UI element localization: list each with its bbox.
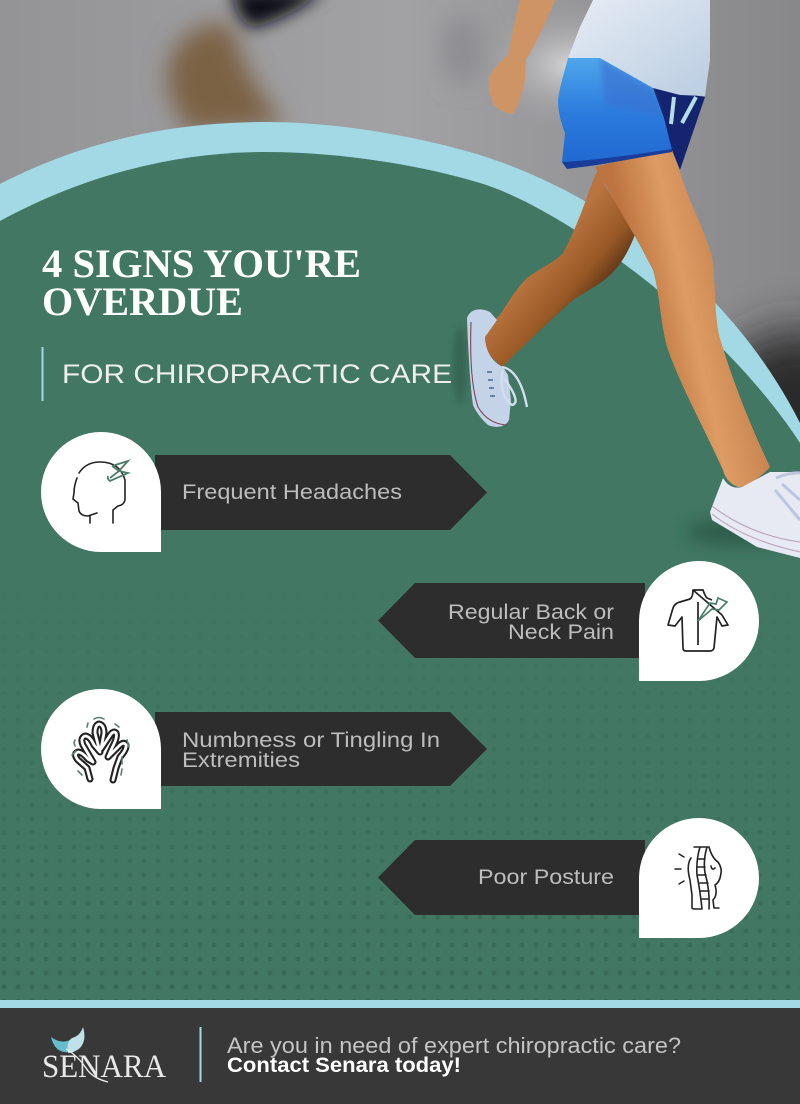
- icon badge: spine posture: [639, 818, 759, 938]
- sign 4: poor posture: [378, 818, 759, 938]
- footer call to action: Are you in need of expert chiropractic care?: [227, 1033, 681, 1058]
- logo: Senara: [42, 1027, 166, 1085]
- footer call to action: Contact Senara today!: [227, 1054, 461, 1077]
- footer divider: [200, 1027, 202, 1082]
- icon badge: back with lightning: [639, 561, 759, 681]
- back shoe: [467, 309, 527, 427]
- back leg: [485, 170, 636, 367]
- runner photo: [453, 0, 800, 558]
- arrow banner 1: Frequent Headaches: [182, 480, 402, 504]
- green panel: [0, 152, 800, 1000]
- dot pattern: [2, 845, 800, 1000]
- arrow banner 2: [378, 583, 645, 658]
- sign 3: numbness or tingling: [41, 689, 487, 809]
- footer band: [0, 1000, 800, 1008]
- shoe shadow: [687, 519, 797, 545]
- t-shirt: [568, 0, 710, 96]
- photo background: blurred street: [0, 0, 800, 490]
- title: 4 SIGNS YOU'RE: [42, 241, 361, 286]
- back shoe shadow: [453, 327, 467, 403]
- arrow banner 1: [155, 455, 487, 530]
- title: OVERDUE: [42, 279, 243, 324]
- arrow banner 2: Regular Back or: [448, 600, 614, 624]
- arrow banner 2: Neck Pain: [508, 620, 614, 644]
- footer panel: [0, 1008, 800, 1104]
- arrow banner 3: Extremities: [182, 748, 300, 772]
- logo: Senara: SENARA: [42, 1049, 166, 1085]
- footer call to action: [227, 1033, 681, 1077]
- title: [42, 241, 361, 324]
- light blue arc: [0, 122, 800, 1000]
- sign 1: frequent headaches: [41, 432, 487, 552]
- sign 2: regular back or neck pain: [378, 561, 759, 681]
- subtitle with rule: FOR CHIROPRACTIC CARE: [62, 359, 452, 389]
- logo leaf: [51, 1027, 108, 1082]
- arrow banner 4: Poor Posture: [478, 865, 614, 889]
- arm: [489, 0, 555, 114]
- front shoe: [710, 472, 800, 558]
- icon badge: tingling hand: [41, 689, 161, 809]
- arrow banner 3: [155, 712, 487, 786]
- shorts: [558, 58, 705, 170]
- front leg: [595, 150, 770, 487]
- icon badge: head with lightning: [41, 432, 161, 552]
- arrow banner 3: Numbness or Tingling In: [182, 728, 440, 752]
- arrow banner 4: [378, 840, 645, 915]
